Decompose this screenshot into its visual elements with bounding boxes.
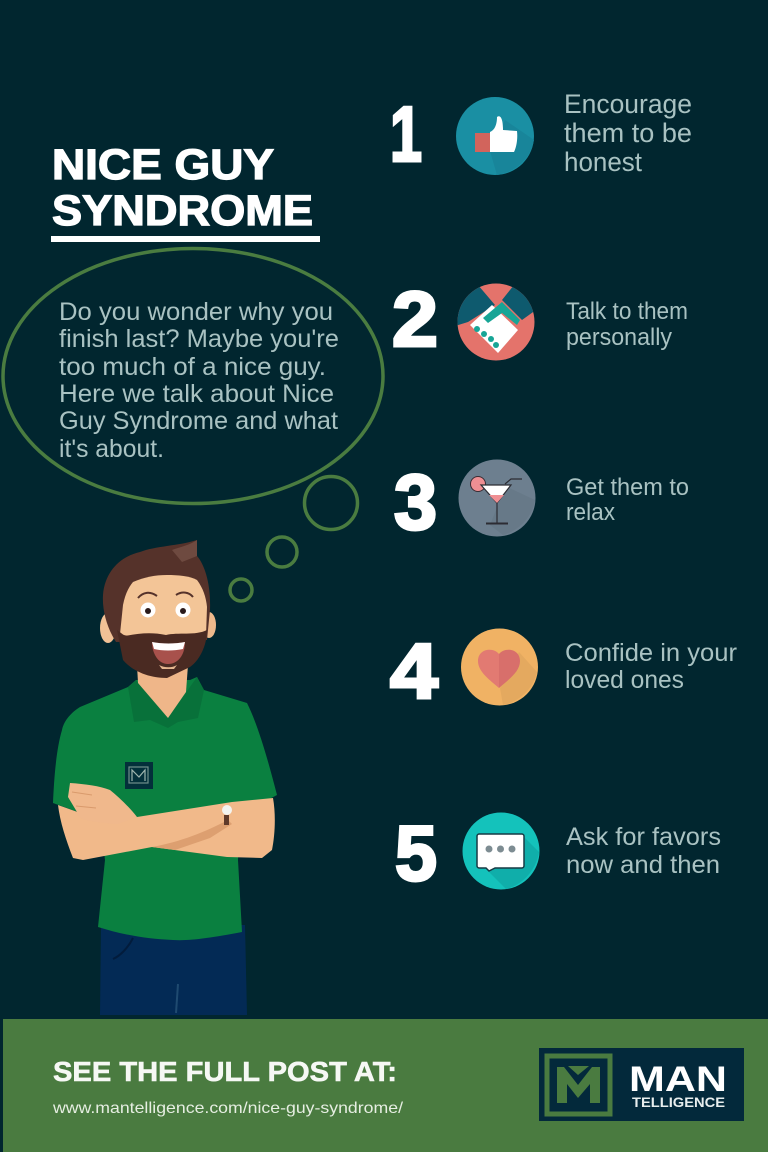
step 3 (394, 458, 689, 546)
step 5 text: now and then (566, 851, 720, 879)
title: NICE GUY (52, 141, 274, 189)
step 4 text (565, 639, 737, 694)
icon: cocktail (458, 460, 536, 536)
step 1: 1 (390, 90, 422, 178)
step 5 text: Ask for favors (566, 823, 721, 851)
footer url: www.mantelligence.com/nice-guy-syndrome/ (52, 1100, 404, 1117)
step 2: 2 (392, 275, 438, 363)
mouth (152, 642, 185, 664)
logo (539, 1048, 744, 1121)
step 2 (393, 284, 686, 360)
man illustration (53, 540, 277, 1015)
step 3 text: Get them to (566, 474, 689, 501)
step 3 text: relax (566, 499, 615, 526)
eyes (140, 602, 156, 618)
bubble text: it's about. (59, 435, 164, 463)
icon: heart (461, 628, 538, 706)
title (51, 141, 320, 242)
eyebrows (138, 593, 157, 598)
ears (100, 613, 116, 643)
beard (117, 630, 207, 678)
icon: handshake (455, 284, 540, 360)
collar shade (128, 677, 204, 728)
watch (222, 805, 232, 825)
shirt (53, 677, 277, 940)
step 1 text (564, 89, 692, 177)
trousers (100, 925, 247, 1015)
step 1 (390, 89, 692, 178)
icon: thumbs up (456, 97, 534, 175)
step 2 text (566, 298, 688, 351)
step 1 text: Encourage (564, 89, 692, 119)
footer panel (3, 1019, 768, 1152)
step 5 (395, 809, 721, 897)
hair (103, 540, 210, 642)
step 2 text: personally (566, 324, 672, 351)
step 3 text (566, 474, 689, 526)
step 5: 5 (395, 809, 437, 897)
step 5 text (566, 823, 721, 879)
bubble text: Here we talk about Nice (59, 380, 334, 408)
bubble text: Guy Syndrome and what (59, 407, 338, 435)
title: SYNDROME (52, 187, 313, 235)
bubble text: too much of a nice guy. (59, 353, 326, 381)
step 3: 3 (394, 458, 437, 546)
neck (137, 665, 188, 718)
bubble text: finish last? Maybe you're (59, 325, 339, 353)
chest logo (125, 762, 153, 789)
icon: speech bubble (462, 812, 540, 890)
step 4 text: loved ones (565, 666, 684, 694)
step 4 text: Confide in your (565, 639, 737, 667)
step 2 text: Talk to them (566, 298, 688, 325)
bubble text: Do you wonder why you (59, 298, 333, 326)
arms (58, 798, 275, 860)
face (120, 575, 207, 645)
step 4: 4 (390, 627, 438, 715)
step 1 text: honest (564, 147, 642, 177)
bubble text (59, 298, 339, 463)
footer heading: SEE THE FULL POST AT: (53, 1056, 397, 1087)
step 1 text: them to be (564, 118, 692, 148)
step 4 (390, 627, 737, 715)
logo: MAN (629, 1060, 727, 1099)
thought bubble (3, 248, 383, 601)
logo: TELLIGENCE (632, 1095, 725, 1110)
